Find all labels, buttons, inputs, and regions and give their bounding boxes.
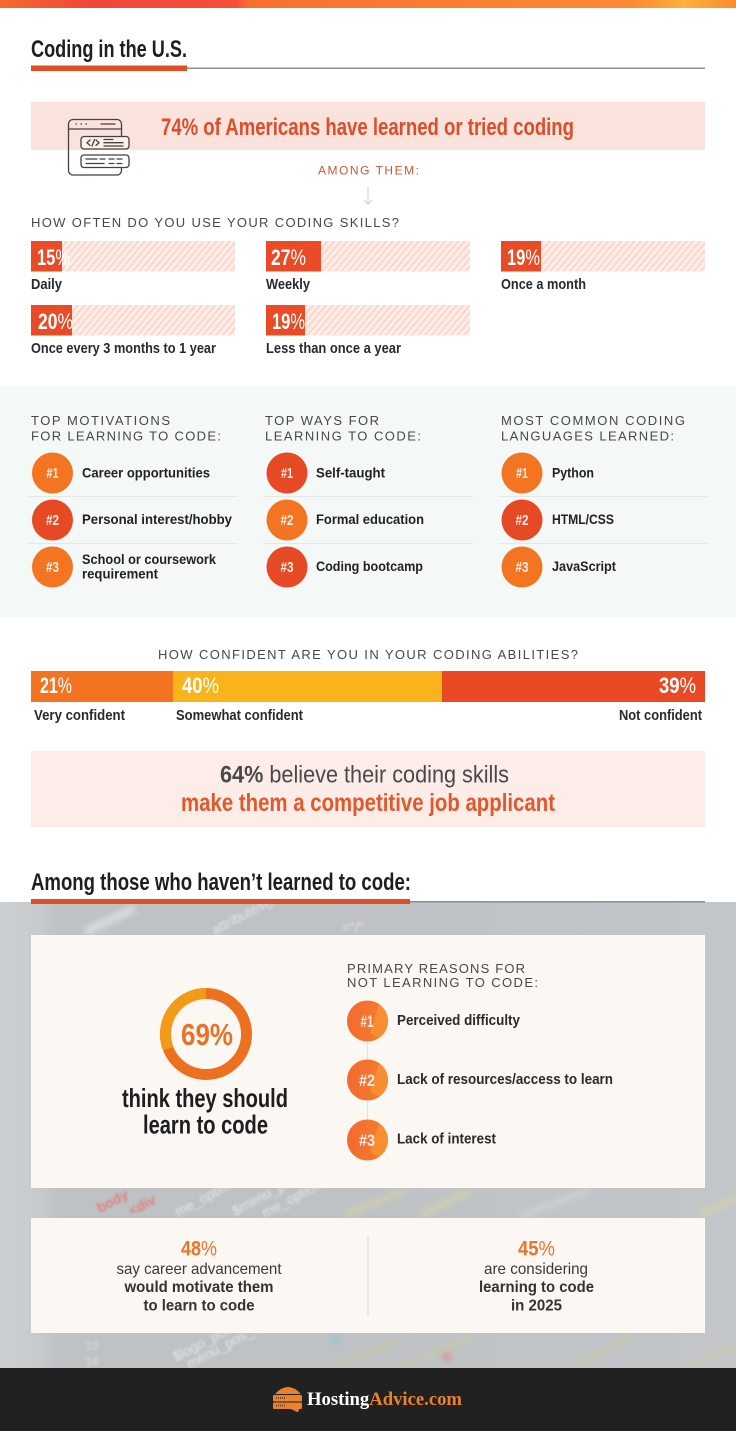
column: ways: #3 [280, 559, 294, 576]
bar: every 3 months to 1 year 20%: 20% [38, 309, 73, 334]
label: among them: AMONG THEM: [318, 164, 419, 178]
heading: Coding in the U.S. [31, 36, 705, 71]
icon: code window [68, 120, 129, 175]
stat: 48%: 48% [181, 1238, 217, 1260]
stat: 45%: learning to code [479, 1279, 594, 1296]
column: motivations: School or coursework [82, 551, 216, 567]
list: primary reasons: NOT LEARNING TO CODE: [347, 975, 538, 990]
stat: 48% [116, 1238, 282, 1314]
bar: daily 15%: 15% [37, 245, 70, 270]
bar: weekly 27% [266, 241, 470, 293]
text: think they should learn to code [122, 1083, 288, 1140]
column: ways: Coding bootcamp [316, 558, 423, 574]
reason 2 [347, 1060, 613, 1100]
bar: less than once a year 19%: Less than once a year [266, 340, 401, 357]
column: ways: Self-taught [316, 464, 385, 480]
column: motivations: Personal interest/hobby [82, 511, 232, 527]
bar: weekly 27%: 27% [271, 245, 306, 270]
column: ways: LEARNING TO CODE: [265, 428, 421, 444]
reason 1: Perceived difficulty [397, 1012, 521, 1029]
stacked bar: confidence: 21% [40, 673, 72, 698]
column: motivations: #2 [46, 512, 59, 529]
stat: 48%: to learn to code [144, 1298, 255, 1314]
chart heading: confidence: HOW CONFIDENT ARE YOU IN YOUR CODING ABILITIES? [158, 647, 578, 662]
background photo: blurred code screen: me_options [172, 1172, 243, 1220]
reason 2: Lack of resources/access to learn [397, 1071, 613, 1088]
column: ways: #2 [280, 512, 294, 529]
column: ways: TOP WAYS FOR [265, 413, 379, 428]
bar: once a month 19%: 19% [507, 245, 540, 270]
donut: 69% [165, 994, 246, 1074]
background photo: blurred code screen: $menu_pos [229, 1170, 301, 1219]
column: motivations: requirement [82, 566, 158, 582]
heading: Coding in the U.S.: Coding in the U.S. [31, 36, 187, 63]
reason 3: Lack of interest [397, 1130, 496, 1148]
background photo: blurred code screen: 33 [85, 1339, 99, 1353]
background photo: blurred code screen: ="/" [342, 919, 364, 935]
logo text: HostingAdvice.com [307, 1389, 462, 1410]
chart heading: how often: HOW OFTEN DO YOU USE YOUR CODING SKILLS? [31, 215, 399, 230]
bar: daily 15%: Daily [31, 276, 63, 293]
heading: among those who haven't learned: Among those who haven’t learned to code: [31, 869, 411, 896]
bar: daily 15% [31, 241, 235, 293]
callout: 64% competitive job applicant: 64% believe their coding skills [220, 762, 509, 788]
panel: bottom statistics [31, 1218, 705, 1333]
background photo: blurred code screen: $logo_pos [170, 1320, 234, 1365]
top gradient bar [0, 0, 736, 8]
column: languages: LANGUAGES LEARNED: [501, 428, 674, 444]
background photo: blurred code screen: attributes(); [209, 890, 279, 938]
background photo: blurred code screen [0, 890, 736, 1372]
callout: 64% competitive job applicant [31, 751, 705, 827]
column: motivations: #1 [46, 465, 58, 482]
column: languages: #2 [516, 512, 528, 529]
text: think they should learn to code: think they should [122, 1083, 288, 1113]
footer [0, 1368, 736, 1431]
list: primary reasons: PRIMARY REASONS FOR [347, 961, 525, 976]
text: think they should learn to code: learn to code [143, 1110, 268, 1140]
background photo: blurred code screen: <div [126, 1191, 159, 1219]
reason 1: #1 [360, 1012, 374, 1031]
bar: less than once a year 19% [266, 305, 470, 357]
callout: 64% competitive job applicant: make them a competitive job applicant [181, 789, 556, 817]
background photo: blurred code screen: me_options [259, 1173, 330, 1221]
bar: weekly 27%: Weekly [266, 276, 311, 293]
panel: top rankings [0, 386, 736, 617]
background photo: blurred code screen: body [94, 1186, 131, 1216]
bar chart: coding skill usage frequency [31, 241, 705, 357]
reason 2: #2 [359, 1071, 375, 1090]
column: motivations: Career opportunities [82, 464, 210, 480]
column: ways: #1 [281, 465, 293, 482]
bar: once a month 19% [501, 241, 705, 293]
bar: less than once a year 19%: 19% [272, 309, 305, 334]
stat: 45% [479, 1238, 594, 1314]
donut: 69%: 69% [181, 1017, 233, 1052]
column: languages: JavaScript [552, 558, 616, 574]
column: motivations [31, 413, 232, 588]
list: primary reasons [347, 961, 613, 1160]
panel: think they should learn [31, 935, 705, 1188]
stacked bar: confidence: 39% [659, 673, 696, 698]
column: ways: Formal education [316, 511, 424, 527]
stacked bar: confidence: Somewhat confident [176, 707, 303, 724]
stat: 48%: say career advancement [116, 1261, 282, 1278]
column: languages: #1 [516, 465, 528, 482]
stat: 45%: in 2025 [511, 1298, 562, 1314]
column: languages: HTML/CSS [552, 511, 614, 527]
stacked bar: confidence: Very confident [34, 707, 125, 724]
stat: 45%: are considering [484, 1261, 588, 1278]
banner: 74% of Americans: 74% of Americans have learned or tried coding [161, 114, 574, 141]
banner: 74% of Americans [31, 102, 705, 150]
stat: 45%: 45% [518, 1238, 555, 1260]
arrow: down [364, 186, 372, 204]
stat: 48%: would motivate them [124, 1279, 274, 1296]
column: languages: #3 [516, 559, 528, 576]
bar: every 3 months to 1 year 20%: Once every 3 months to 1 year [31, 340, 216, 357]
background photo: blurred code screen: menu_pos_c [184, 1320, 262, 1372]
reason 1 [347, 1000, 521, 1042]
reason 3: #3 [359, 1131, 375, 1150]
column: languages [501, 413, 685, 588]
column: languages: Python [552, 464, 594, 480]
bar: every 3 months to 1 year 20% [31, 305, 235, 357]
stacked bar: confidence: 40% [182, 673, 219, 698]
stacked bar: confidence: Not confident [619, 707, 702, 724]
column: motivations: FOR LEARNING TO CODE: [31, 428, 221, 444]
bar: once a month 19%: Once a month [501, 276, 586, 293]
column: motivations: TOP MOTIVATIONS [31, 413, 170, 428]
column: languages: MOST COMMON CODING [501, 413, 685, 428]
column: ways [265, 413, 424, 588]
reason 3 [347, 1120, 496, 1160]
heading: among those who haven't learned [31, 869, 705, 904]
stacked bar: confidence [31, 671, 705, 724]
icon: logo [273, 1387, 302, 1412]
background photo: blurred code screen: 34 [85, 1355, 99, 1369]
column: motivations: #3 [46, 559, 59, 576]
